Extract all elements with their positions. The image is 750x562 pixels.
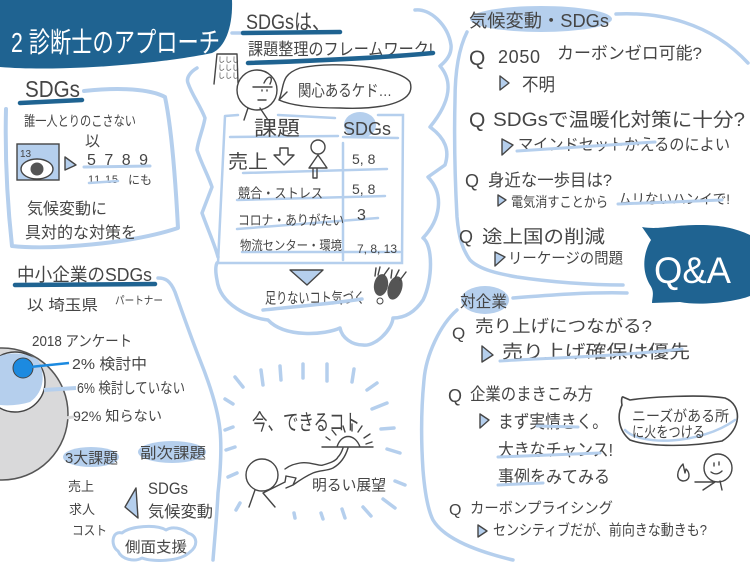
panel: SDGs: 以 [85,133,100,150]
panel: SMEs and SDGs: コスト [72,523,107,538]
panel: SMEs and SDGs: 気候変動 [148,503,213,521]
panel: climate change and SDGs [455,6,748,285]
header banner: 2 診断士のアプローチ [11,27,220,58]
panel: for companies: 企業のまきこみ方 [470,385,593,404]
panel: SDGs: 誰一人とりのこさない [24,113,136,129]
icon: notice board [214,54,239,84]
icon: eyes [372,267,406,304]
panel: SMEs and SDGs: パートナー [115,294,163,307]
chart: nested circles [0,348,76,480]
table: issues and SDGs: 5, 8 [352,181,376,197]
panel: climate change and SDGs: Q [465,171,479,191]
panel: climate change and SDGs: Q [459,227,473,247]
table: issues and SDGs: 課題 [254,118,300,140]
panel: for companies: カーボンプライシング [470,500,613,517]
label: secondary issues: 副次課題 [140,445,206,462]
panel: climate change and SDGs: SDGsで温暖化対策に十分? [493,109,745,131]
panel: SMEs and SDGs: 以 埼玉県 [27,297,98,314]
panel: SDGs: 5 7 8 9 [87,152,148,169]
table: issues and SDGs: コロナ・ありがたい [238,213,344,228]
panel: SDGs: 11.15 [88,174,118,186]
panel: SMEs and SDGs [0,265,221,560]
cloud: side support: 側面支援 [125,539,187,556]
panel: SMEs and SDGs: 売上 [68,479,94,494]
panel: for companies: センシティブだが、前向きな動きも? [493,521,707,539]
speech bubble [279,65,411,108]
panel: climate change and SDGs: カーボンゼロ可能? [557,44,702,63]
panel: SDGs: SDGs [25,76,80,102]
panel: SDGs: にも [128,173,152,187]
arrow [125,488,138,518]
panel: climate change and SDGs: 不明 [522,75,555,95]
icon: person [309,140,327,178]
table: issues and SDGs: 売上 [228,151,268,173]
arrow [65,157,76,170]
panel: for companies [422,286,737,560]
panel: climate change and SDGs: 気候変動・SDGs [469,11,609,31]
icon: notice board: ししし [218,72,239,80]
table: issues and SDGs: 物流センター・環境 [240,238,342,253]
panel: SMEs and SDGs: 求人 [69,502,95,517]
panel: for companies: Q [449,502,461,519]
panel: SDGs: 気候変動に [27,200,107,218]
speech bubble: 関心あるケド… [298,82,392,100]
panel: for companies: 売り上げ確保は優先 [502,342,690,362]
panel: SMEs and SDGs: 2018 アンケート [32,333,132,350]
panel: climate change and SDGs: 電気消すことから [511,194,608,210]
panel: for companies: 対企業 [460,293,507,311]
icon: SDG 13 eye: 13 [20,149,32,160]
icon: down arrow [274,148,294,165]
panel: for companies: Q [448,386,462,406]
panel: climate change and SDGs: Q [469,47,485,70]
figure: pointing person [246,448,348,507]
label: secondary issues [138,441,206,463]
icon: notice board: ししし [218,56,239,64]
panel: SMEs and SDGs: SDGs [148,479,188,498]
panel: SMEs and SDGs: 92% 知らない [73,408,162,424]
icon: notice board: ししし [218,64,239,72]
panel: for companies: 事例をみてみる [498,467,610,487]
panel: climate change and SDGs: 途上国の削減 [482,227,605,247]
figure: smiling person with fire [678,454,732,490]
table: issues and SDGs: 競合・ストレス [238,186,323,201]
panel: framework cloud: SDGsは、 [246,11,330,34]
callout: ニーズがある所 [632,408,729,425]
panel: climate change and SDGs: Q [469,109,485,132]
rays [225,364,405,519]
panel: SDGs: 具対的な対策を [25,224,137,242]
table: issues and SDGs: SDGs [343,119,391,139]
panel: climate change and SDGs: ムリないハンイで! [618,191,730,207]
callout [619,396,737,445]
panel: what can be done now: 明るい展望 [312,477,386,494]
panel: for companies: 売り上げにつながる? [475,317,652,336]
icon: SDG 13 eye [17,144,59,180]
panel: for companies: Q [452,324,465,343]
panel: climate change and SDGs: 身近な一歩目は? [488,171,612,190]
header banner [0,0,232,69]
panel: framework cloud: 課題整理のフレームワーク! [248,40,433,59]
label: three big issues: 3大課題 [65,450,118,467]
panel: SMEs and SDGs: 2% 検討中 [72,356,147,373]
panel: for companies: まず実情きく。 [498,412,608,432]
panel: framework cloud [187,10,451,345]
panel: for companies: 大きなチャンス! [498,440,613,460]
panel: SMEs and SDGs: 6% 検討していない [77,380,185,397]
panel: climate change and SDGs: 2050 [498,47,540,67]
icon: sun on horizon [322,424,373,447]
table: issues and SDGs: 7, 8, 13 [357,242,397,256]
arrow down [290,270,323,285]
panel: climate change and SDGs: リーケージの問題 [508,250,623,267]
table: issues and SDGs: 5, 8 [352,151,376,167]
panel: what can be done now: 今、できるコト [252,410,360,435]
table: issues and SDGs [218,112,403,263]
panel: SDGs [6,76,178,247]
cloud: side support [113,526,196,560]
panel: climate change and SDGs: マインドセットかえるのによい [518,137,730,154]
panel: framework cloud: 足りないコト気づく [265,290,365,307]
panel: what can be done now [225,364,405,519]
callout: に火をつける [632,424,705,441]
speech bubble: Q&A [642,225,750,304]
panel: SMEs and SDGs: 中小企業のSDGs [17,265,152,285]
figure: presenter [237,70,277,120]
table: issues and SDGs: 3 [357,207,366,224]
speech bubble: Q&A: Q&A [654,250,731,291]
